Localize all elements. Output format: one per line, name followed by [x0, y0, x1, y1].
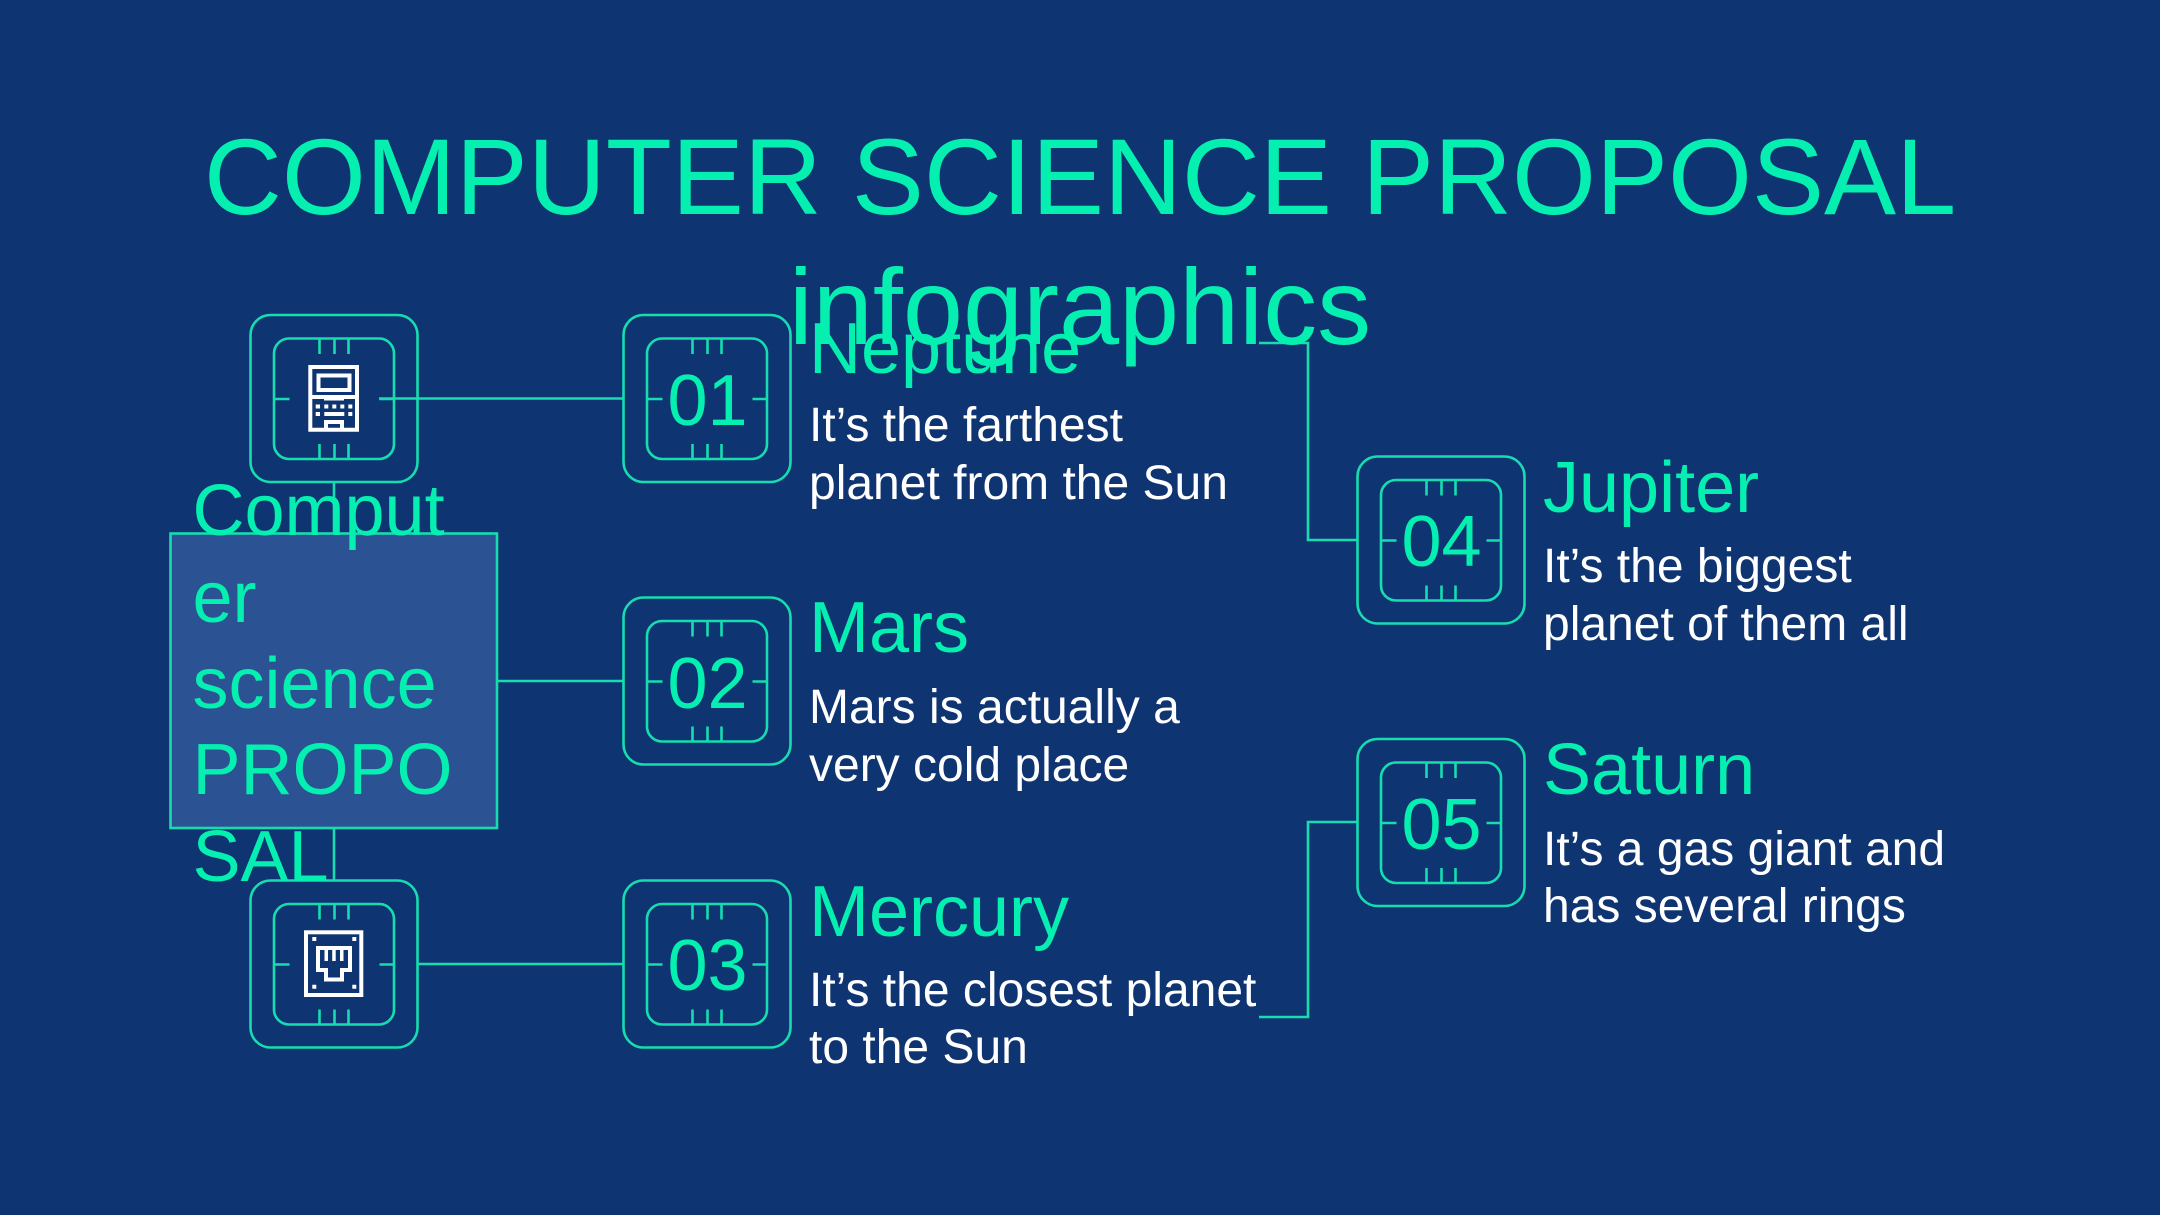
center panel: computer science proposal: science: [192, 644, 437, 724]
step 05: Saturn: [1358, 730, 1945, 933]
icon: laptop: [310, 367, 357, 430]
step 01: Neptune: planet from the Sun: [809, 457, 1228, 510]
center panel: computer science proposal: [170, 471, 497, 897]
step 03: Mercury: to the Sun: [809, 1021, 1028, 1074]
step 03: Mercury: It’s the closest planet: [809, 964, 1256, 1017]
step 04: Jupiter: It’s the biggest: [1543, 540, 1852, 593]
center panel: computer science proposal: Comput: [192, 471, 445, 551]
step 02: Mars: Mars: [809, 588, 969, 668]
connector lines: [334, 343, 1358, 1017]
center panel: computer science proposal: SAL: [192, 817, 329, 897]
step 04: Jupiter: Jupiter: [1543, 448, 1759, 528]
step 04: Jupiter: 04: [1401, 502, 1482, 582]
step 05: Saturn: It’s a gas giant and: [1543, 823, 1945, 876]
step 03: Mercury: [624, 872, 1256, 1074]
center panel: computer science proposal: PROPO: [192, 730, 453, 810]
step 02: Mars: very cold place: [809, 739, 1129, 792]
step 04: Jupiter: [1358, 448, 1909, 651]
chip frame: network icon: [250, 880, 418, 1048]
step 05: Saturn: 05: [1401, 785, 1482, 865]
step 05: Saturn: has several rings: [1543, 880, 1906, 933]
center panel: computer science proposal: er: [192, 558, 257, 638]
title: infographics: [789, 246, 1371, 367]
step 03: Mercury: 03: [667, 926, 748, 1006]
step 02: Mars: [624, 588, 1180, 792]
title: [204, 116, 1956, 367]
step 01: Neptune: 01: [667, 361, 748, 441]
step 05: Saturn: Saturn: [1543, 730, 1755, 810]
step 01: Neptune: Neptune: [809, 309, 1081, 389]
step 01: Neptune: It’s the farthest: [809, 399, 1123, 452]
chip frame: computer icon: [250, 315, 418, 482]
step 02: Mars: 02: [667, 644, 748, 724]
step 01: Neptune: [624, 309, 1228, 510]
title: COMPUTER SCIENCE PROPOSAL: [204, 116, 1956, 237]
step 04: Jupiter: planet of them all: [1543, 598, 1909, 651]
step 02: Mars: Mars is actually a: [809, 681, 1180, 734]
step 03: Mercury: Mercury: [809, 872, 1069, 952]
icon: ethernet port: [306, 932, 361, 995]
